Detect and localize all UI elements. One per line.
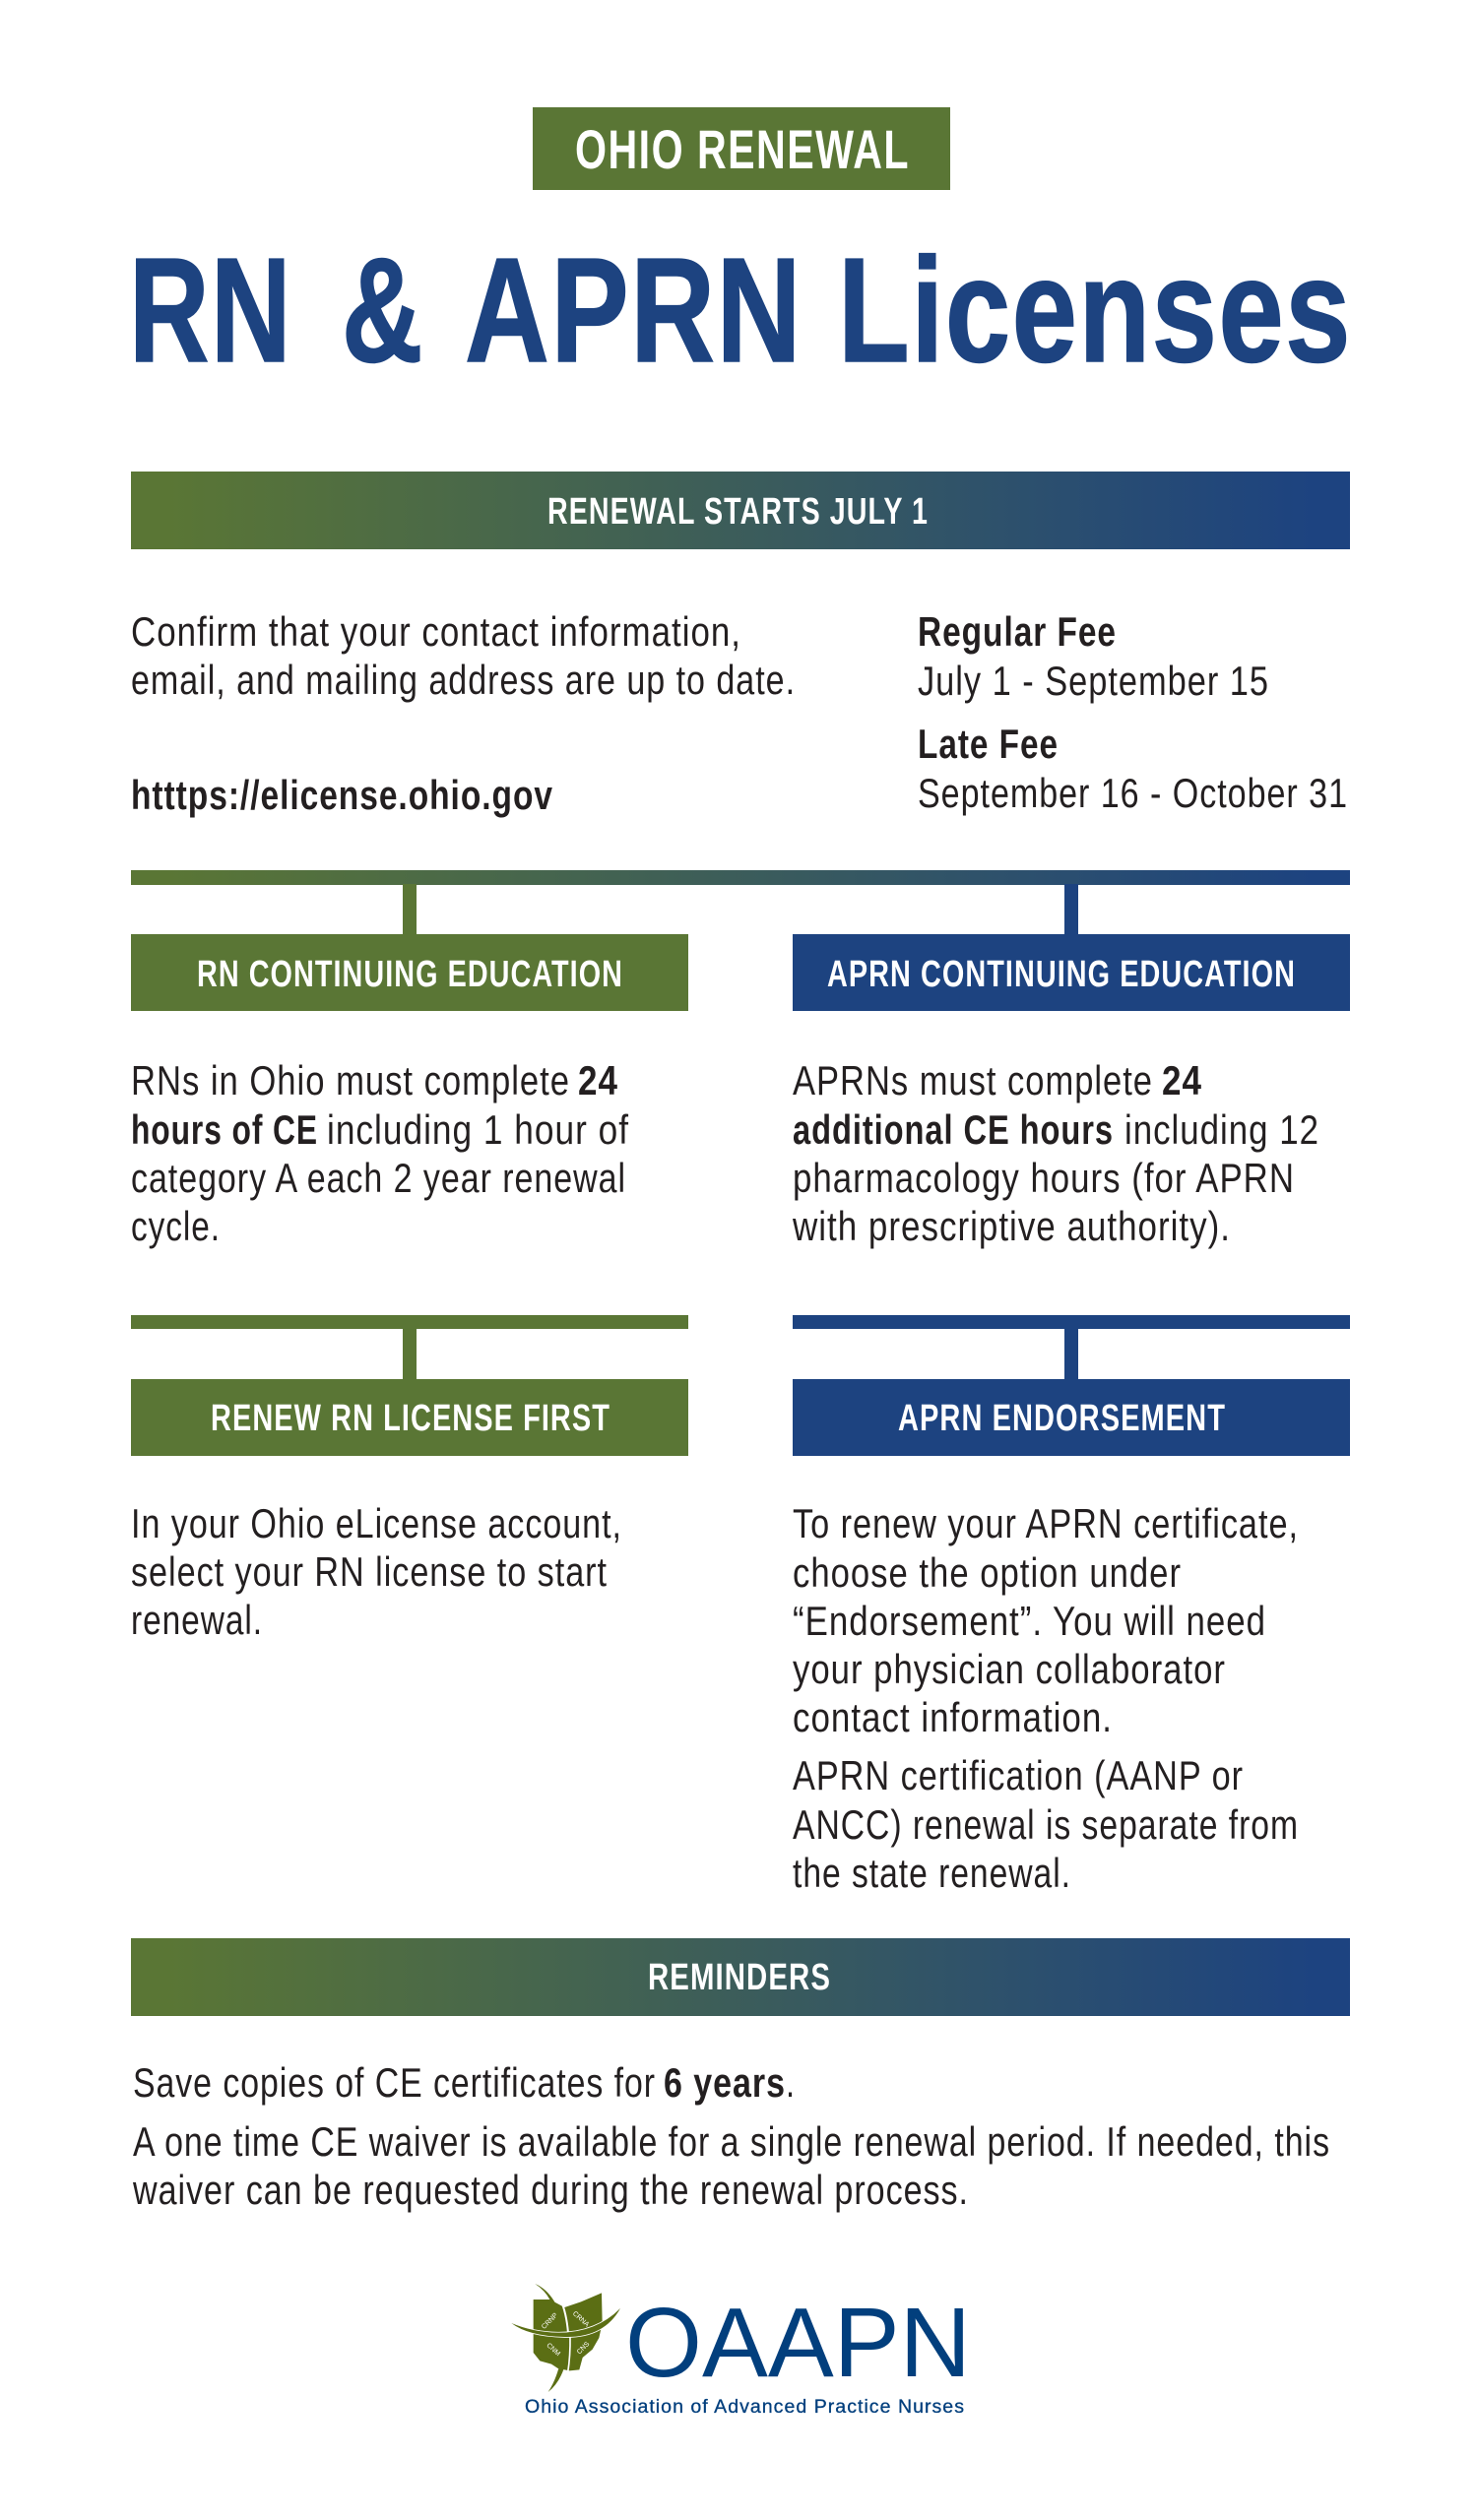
panel: APRN endorsement: APRN ENDORSEMENT — [898, 1398, 1226, 1439]
tagline: Ohio Association of Advanced Practice Nurses — [525, 2397, 965, 2418]
wordmark: OAAPN — [625, 2288, 971, 2398]
panel: renew RN license first: In your Ohio eLicense account, — [131, 1500, 622, 1546]
text block: fee dates: Late Fee — [918, 721, 1059, 767]
panel: APRN endorsement: contact information. — [793, 1694, 1113, 1740]
panel: RN continuing education: hours of CE — [131, 1106, 318, 1153]
text block: confirm contact information: email, and mailing address are up to date. — [131, 657, 796, 703]
text block: fee dates: September 16 - October 31 — [918, 770, 1348, 816]
icon: Ohio state mark: CRNP — [541, 2312, 559, 2331]
panel: RN continuing education: 24 — [578, 1057, 618, 1103]
text block: reminders: . — [786, 2059, 796, 2106]
panel: APRN continuing education: pharmacology hours (for APRN — [793, 1155, 1295, 1201]
panel: APRN endorsement: To renew your APRN certificate, — [793, 1500, 1299, 1546]
icon: Ohio state mark: CRNA — [571, 2310, 591, 2329]
title: APRN — [465, 226, 803, 393]
title: Licenses — [838, 226, 1352, 393]
panel: APRN endorsement — [793, 1315, 1350, 1896]
panel: APRN endorsement: the state renewal. — [793, 1850, 1071, 1896]
panel: APRN continuing education: APRN CONTINUING EDUCATION — [827, 954, 1296, 995]
panel: APRN endorsement: “Endorsement”. You will need — [793, 1598, 1266, 1644]
panel: APRN endorsement: your physician collaborator — [793, 1646, 1226, 1692]
title: & — [342, 226, 424, 393]
panel: APRN endorsement: ANCC) renewal is separate from — [793, 1801, 1299, 1848]
panel: APRN endorsement: choose the option under — [793, 1549, 1182, 1596]
connector: gradient bar — [131, 870, 1350, 885]
panel: renew RN license first — [131, 1315, 688, 1643]
panel: RN continuing education: RN CONTINUING EDUCATION — [197, 954, 623, 995]
title — [129, 226, 1352, 393]
text block: reminders: Save copies of CE certificates for — [133, 2059, 656, 2106]
banner: renewal starts July 1 — [131, 472, 1350, 549]
text block: reminders: 6 years — [664, 2059, 786, 2106]
text block: reminders: waiver can be requested during the renewal process. — [132, 2167, 969, 2213]
panel: APRN continuing education: including 12 — [1124, 1106, 1319, 1153]
banner: reminders — [131, 1938, 1350, 2016]
panel: APRN continuing education: with prescriptive authority). — [792, 1203, 1231, 1249]
icon: Ohio state mark: CNM — [545, 2342, 561, 2358]
panel: renew RN license first: renewal. — [131, 1597, 263, 1643]
text block: confirm contact information — [131, 608, 796, 703]
panel: APRN continuing education: APRNs must complete — [793, 1057, 1153, 1103]
banner: reminders: REMINDERS — [648, 1957, 831, 1998]
icon: Ohio state mark: CNS — [576, 2341, 592, 2356]
text block: reminders — [132, 2059, 1330, 2213]
text block: fee dates — [918, 608, 1348, 816]
panel: renew RN license first: select your RN license to start — [131, 1548, 608, 1595]
text block: fee dates: Regular Fee — [918, 608, 1117, 655]
panel: RN continuing education: including 1 hour of — [327, 1106, 629, 1153]
title: RN — [129, 226, 292, 393]
panel: APRN continuing education: 24 — [1162, 1057, 1202, 1103]
panel: APRN continuing education: additional CE hours — [793, 1106, 1114, 1153]
badge: Ohio Renewal: OHIO RENEWAL — [575, 118, 910, 180]
logo: OAAPN — [511, 2284, 971, 2418]
panel: RN continuing education: cycle. — [131, 1203, 221, 1249]
panel: RN continuing education: category A each 2 year renewal — [131, 1155, 626, 1201]
link: eLicense URL: htttps://elicense.ohio.gov — [131, 772, 553, 818]
text block: confirm contact information: Confirm that your contact information, — [131, 608, 741, 655]
icon: Ohio state mark — [511, 2284, 620, 2392]
panel: RN continuing education — [131, 884, 688, 1249]
badge: Ohio Renewal — [533, 107, 950, 190]
panel: APRN endorsement: APRN certification (AANP or — [793, 1752, 1244, 1798]
panel: APRN continuing education — [792, 884, 1350, 1249]
banner: renewal starts July 1: RENEWAL STARTS JULY 1 — [547, 491, 929, 533]
panel: RN continuing education: RNs in Ohio must complete — [131, 1057, 570, 1103]
text block: fee dates: July 1 - September 15 — [918, 658, 1269, 704]
panel: renew RN license first: RENEW RN LICENSE FIRST — [211, 1398, 610, 1439]
